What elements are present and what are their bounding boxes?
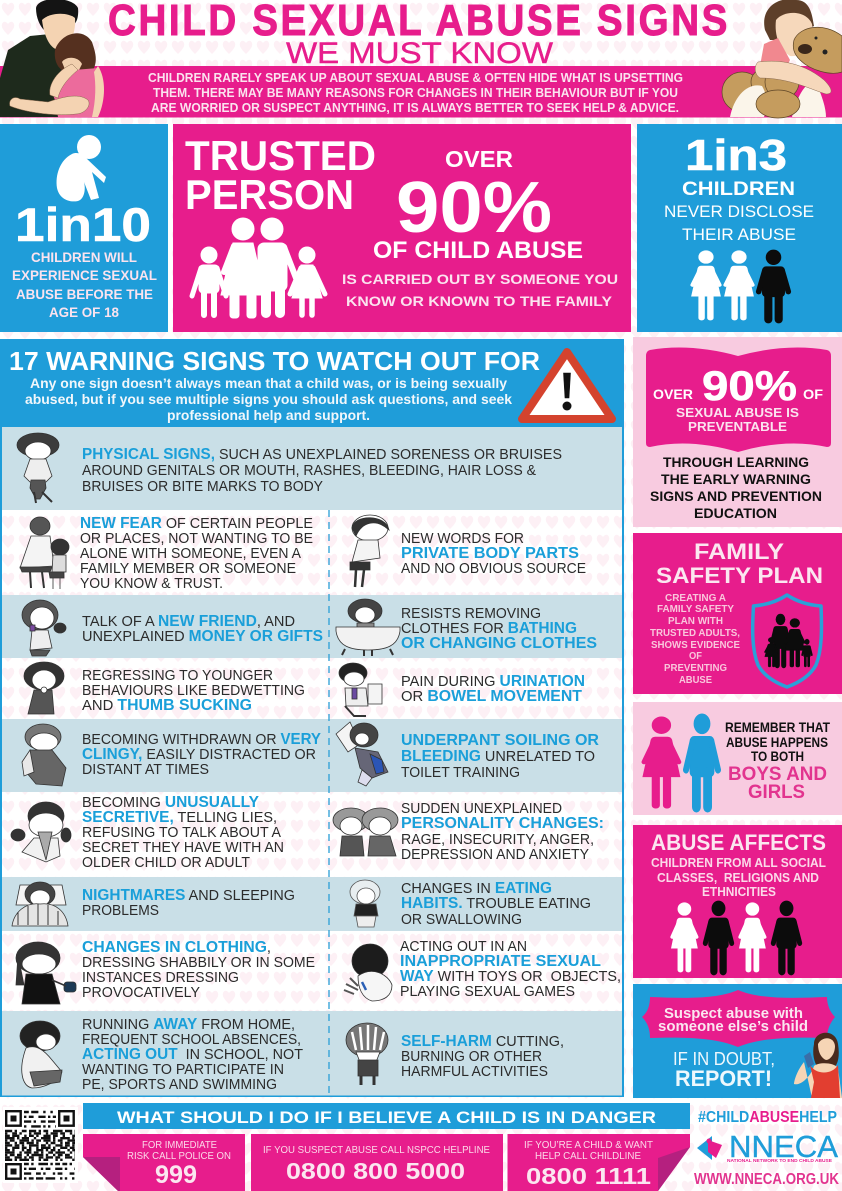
icon: family [192, 218, 325, 318]
icon: child sucking thumb [24, 662, 64, 714]
stat: over 90% [373, 146, 583, 264]
text block: NEW WORDS FOR [401, 531, 524, 547]
subtitle: WE MUST KNOW [286, 37, 554, 70]
tagline: NATIONAL NETWORK TO END CHILD ABUSE [727, 1158, 832, 1163]
text block [25, 376, 513, 423]
icon: girl covering mouth [11, 802, 71, 862]
text block: PROVOCATIVELY [82, 985, 200, 1001]
text block: BECOMING WITHDRAWN OR VERY [82, 731, 322, 748]
text block [82, 613, 323, 645]
text block: SECRETIVE, TELLING LIES, [82, 809, 277, 826]
highlight: boys and girls: GIRLS [748, 782, 805, 803]
text block: BLEEDING UNRELATED TO [401, 748, 595, 765]
heading: trusted person: PERSON [185, 171, 354, 218]
text block: PE, SPORTS AND SWIMMING [82, 1077, 277, 1093]
banner: over 90% [646, 348, 831, 452]
icon: boy [350, 515, 389, 587]
icon: child eating [350, 880, 380, 927]
banner: over 90%: OF [803, 386, 823, 402]
sign: inappropriate sexual way [344, 939, 621, 1001]
text block: PERSONALITY CHANGES: [401, 815, 604, 832]
sign: secretive [11, 794, 284, 871]
callout: report: REPORT! [675, 1066, 772, 1091]
banner: suspect abuse: someone else’s child [658, 1018, 808, 1035]
text block: EDUCATION [694, 506, 777, 521]
text block: ABUSE BEFORE THE [16, 286, 153, 302]
header band [0, 66, 842, 118]
text block [401, 801, 604, 863]
callout: report: IF IN DOUBT, [673, 1049, 775, 1069]
text block: PLAYING SEXUAL GAMES [400, 984, 575, 1000]
text block: ALONE WITH SOMEONE, EVEN A [80, 546, 301, 562]
text block: CHANGES IN CLOTHING, [82, 939, 271, 956]
text block [80, 515, 313, 592]
text block: Any one sign doesn’t always mean that a child was, or is being sexually [30, 376, 508, 391]
text block: OR PLACES, NOT WANTING TO BE [80, 531, 313, 547]
text block: WANTING TO PARTICIPATE IN [82, 1062, 284, 1078]
heading: SAFETY PLAN [656, 563, 823, 588]
text block [651, 855, 826, 899]
wordmark: NNECA [729, 1129, 838, 1164]
icon: curly-haired child [17, 433, 59, 503]
text block: REFUSING TO TALK ABOUT A [82, 825, 281, 841]
text block: DISTANT AT TIMES [82, 762, 209, 778]
text block [82, 939, 315, 1001]
text block [650, 455, 822, 521]
illustration: man comforting girl [0, 0, 104, 117]
intro text: ARE WORRIED OR SUSPECT ANYTHING, IT IS ALWAYS BETTER TO SEEK HELP & ADVICE. [151, 101, 679, 115]
helpline: childline: HELP CALL CHILDLINE [535, 1150, 641, 1162]
text block: REMEMBER THAT [725, 720, 831, 735]
icon: four figures [671, 901, 800, 972]
icon: three figures [692, 250, 788, 320]
text block: TRUSTED ADULTS, [650, 627, 740, 639]
sign: withdrawn [22, 724, 322, 786]
text block: SUDDEN UNEXPLAINED [401, 801, 562, 817]
icon: girl and boy figures [643, 714, 718, 808]
stat: over 90%: OVER [445, 146, 513, 172]
text block [342, 271, 618, 309]
text block: PRIVATE BODY PARTS [401, 545, 579, 562]
panel: family safety plan [633, 533, 842, 694]
sign: personality changes [333, 801, 604, 863]
icon: seated child [57, 135, 106, 201]
text block: KNOW OR KNOWN TO THE FAMILY [346, 293, 613, 309]
sign: running away [20, 1016, 303, 1093]
text block: CHILDREN WILL [31, 249, 137, 265]
text block: RAGE, INSECURITY, ANGER, [401, 832, 594, 848]
helpline: childline [508, 1134, 690, 1191]
text block: BURNING OR OTHER [401, 1049, 542, 1065]
text block [82, 794, 284, 871]
text block: CLASSES, RELIGIONS AND [657, 870, 819, 885]
helpline: NSPCC: IF YOU SUSPECT ABUSE CALL NSPCC HELPLINE [263, 1144, 490, 1156]
banner: suspect abuse: Suspect abuse with [664, 1005, 803, 1022]
text block [401, 1033, 564, 1080]
icon: child sitting [20, 1021, 62, 1088]
text block: BECOMING UNUSUALLY [82, 794, 260, 811]
text block: YOU KNOW & TRUST. [80, 576, 223, 592]
text block: DRESSING SHABBILY OR IN SOME [82, 955, 315, 971]
icon: diamond figure [697, 1136, 722, 1160]
warning header [0, 339, 624, 427]
text block: FAMILY SAFETY [657, 603, 734, 615]
text block [82, 446, 562, 495]
intro text [148, 71, 683, 115]
icon: child on toilet [339, 663, 382, 716]
panel: report [633, 984, 842, 1098]
sign: regressing [24, 662, 305, 714]
text block: UNDERPANT SOILING OR [401, 732, 599, 749]
panel: warning signs [0, 339, 624, 1097]
text block: FREQUENT SCHOOL ABSENCES, [82, 1032, 301, 1048]
sign: new fear [20, 515, 313, 592]
helpline: childline: 0800 1111 [526, 1163, 651, 1189]
text block: CHILDREN [682, 179, 795, 200]
text block [82, 1016, 303, 1093]
sign: nightmares [12, 882, 295, 926]
text block: OR CHANGING CLOTHES [401, 635, 597, 652]
text block: ABUSE HAPPENS [726, 735, 828, 750]
intro text: CHILDREN RARELY SPEAK UP ABOUT SEXUAL ABUSE & OFTEN HIDE WHAT IS UPSETTING [148, 71, 683, 85]
text block: EXPERIENCE SEXUAL [12, 267, 157, 283]
text block: PLAN WITH [668, 615, 723, 627]
text block: ABUSE [679, 674, 712, 686]
text block: INSTANCES DRESSING [82, 970, 239, 986]
text block: CREATING A [665, 592, 726, 604]
stat: over 90%: OF CHILD ABUSE [373, 237, 583, 264]
icon: girl with doll [22, 600, 66, 656]
text block: CHANGES IN EATING [401, 880, 552, 897]
text block: HABITS. TROUBLE EATING [401, 895, 591, 912]
stat: 1in10: 1in10 [15, 198, 151, 251]
intro text: THEM. THERE MAY BE MANY REASONS FOR CHANGES IN THEIR BEHAVIOUR BUT IF YOU [153, 86, 678, 100]
text block [401, 673, 585, 705]
sign: eating habits [350, 880, 591, 928]
text block: REGRESSING TO YOUNGER [82, 668, 273, 684]
icon: child in bath [336, 599, 400, 656]
highlight: boys and girls: BOYS AND [728, 764, 827, 785]
illustration: girl hugging teddy bear [722, 0, 842, 118]
icon: girl in dress [16, 942, 76, 1004]
text block: TOILET TRAINING [401, 765, 520, 781]
helpline: NSPCC [251, 1134, 503, 1191]
helpline: NSPCC: 0800 800 5000 [286, 1158, 465, 1184]
icon: child in bed [12, 882, 68, 926]
text block: PREVENTING [664, 662, 727, 674]
panel: trusted person [173, 124, 631, 332]
text block: RUNNING AWAY FROM HOME, [82, 1016, 295, 1033]
illustration: woman on phone [794, 1033, 842, 1098]
text block [664, 179, 814, 244]
hashtag: #CHILDABUSEHELP [698, 1109, 837, 1126]
icon: adult and child [20, 517, 69, 589]
text block: PAIN DURING URINATION [401, 673, 585, 690]
helpline: police [83, 1134, 245, 1191]
sign: physical [17, 433, 562, 503]
heading: ABUSE AFFECTS [651, 830, 826, 855]
text block: AND THUMB SUCKING [82, 697, 252, 714]
banner: over 90%: PREVENTABLE [688, 419, 787, 434]
text block: IS CARRIED OUT BY SOMEONE YOU [342, 271, 618, 287]
text block [82, 731, 322, 778]
sign: changes in clothing [16, 939, 315, 1004]
icon: child hugging knees [22, 724, 66, 786]
text block: PROBLEMS [82, 903, 159, 919]
panel: 1 in 3 [637, 124, 842, 332]
panel: 1 in 10 [0, 124, 168, 332]
text block: AROUND GENITALS OR MOUTH, RASHES, BLEEDING, HAIR LOSS & [82, 463, 536, 479]
banner: what should I do [83, 1103, 690, 1129]
text block: BRUISES OR BITE MARKS TO BODY [82, 479, 323, 495]
text block: WAY WITH TOYS OR OBJECTS, [400, 968, 621, 985]
banner: what should I do: WHAT SHOULD I DO IF I BELIEVE A CHILD IS IN DANGER [117, 1109, 656, 1127]
text block: THROUGH LEARNING [663, 455, 809, 470]
helpline: police: FOR IMMEDIATE [142, 1139, 217, 1151]
sign: new friend [22, 600, 323, 656]
icon: shield with family [753, 595, 821, 687]
text block: NIGHTMARES AND SLEEPING [82, 887, 295, 904]
text block: SIGNS AND PREVENTION [650, 489, 822, 504]
callout: report [673, 1049, 775, 1091]
text block [401, 880, 591, 928]
QR code [3, 1107, 78, 1183]
heading [656, 539, 823, 588]
text block: TO BOTH [751, 749, 804, 764]
helpline: police: RISK CALL POLICE ON [127, 1150, 231, 1162]
sign: self-harm [346, 1023, 564, 1085]
panel: boys and girls [633, 702, 842, 815]
text block: INAPPROPRIATE SEXUAL [400, 953, 601, 970]
text block [12, 249, 157, 320]
text block: PHYSICAL SIGNS, SUCH AS UNEXPLAINED SORENESS OR BRUISES [82, 446, 562, 463]
sign: bathing [336, 599, 597, 656]
text block [400, 939, 621, 1000]
text block [650, 592, 740, 686]
panel: abuse affects [633, 825, 842, 978]
highlight: boys and girls [728, 764, 827, 803]
text block: CLINGY, EASILY DISTRACTED OR [82, 746, 316, 763]
text block: UNEXPLAINED MONEY OR GIFTS [82, 628, 323, 645]
icon: two children [333, 808, 398, 856]
text block: THE EARLY WARNING [661, 472, 811, 487]
text block: OR BOWEL MOVEMENT [401, 688, 583, 705]
text block [401, 531, 586, 577]
logo: NNECA [694, 1109, 840, 1188]
icon: child with toys [344, 944, 392, 1001]
heading: 17 WARNING SIGNS TO WATCH OUT FOR [9, 346, 540, 376]
sign: urination [339, 663, 585, 716]
banner: over 90%: SEXUAL ABUSE IS [676, 405, 799, 420]
stat: over 90%: 90% [396, 168, 552, 248]
text block: NEVER DISCLOSE [664, 202, 814, 221]
text block: BEHAVIOURS LIKE BEDWETTING [82, 683, 305, 699]
text block: ACTING OUT IN SCHOOL, NOT [82, 1046, 303, 1063]
text block: RESISTS REMOVING [401, 606, 541, 622]
icon: warning triangle [522, 352, 612, 419]
text block: DEPRESSION AND ANXIETY [401, 847, 589, 863]
text block: ETHNICITIES [702, 884, 776, 899]
text block: OLDER CHILD OR ADULT [82, 855, 250, 871]
text block: ACTING OUT IN AN [400, 939, 527, 955]
icon: child in striped hat [346, 1023, 388, 1085]
text block: HARMFUL ACTIVITIES [401, 1064, 548, 1080]
text block [82, 887, 295, 919]
text block: CLOTHES FOR BATHING [401, 620, 577, 637]
text block: SELF-HARM CUTTING, [401, 1033, 564, 1050]
icon: child lying on pillow [336, 722, 388, 786]
text block: TALK OF A NEW FRIEND, AND [82, 613, 295, 630]
text block: abused, but if you see multiple signs you should ask questions, and seek [25, 392, 513, 407]
heading: trusted person [185, 132, 376, 218]
banner: over 90%: 90% [702, 362, 797, 409]
banner: suspect abuse [642, 990, 835, 1047]
text block: FAMILY MEMBER OR SOMEONE [80, 561, 296, 577]
text block: OF [689, 650, 703, 662]
helpline: childline: IF YOU’RE A CHILD & WANT [524, 1139, 654, 1151]
heading: trusted person: TRUSTED [185, 132, 376, 179]
text block [82, 668, 305, 714]
text block: SHOWS EVIDENCE [651, 639, 740, 651]
text block [401, 606, 597, 652]
sign: underpant soiling [336, 722, 599, 786]
text block [401, 732, 599, 781]
stat: 1in3: 1in3 [685, 131, 787, 180]
text block: AND NO OBVIOUS SOURCE [401, 561, 586, 577]
sign: private body parts [350, 515, 586, 587]
text block: CHILDREN FROM ALL SOCIAL [651, 855, 826, 870]
heading: FAMILY [694, 539, 784, 564]
text block [725, 720, 831, 764]
text block: AGE OF 18 [49, 304, 119, 320]
banner: over 90%: OVER [653, 386, 693, 402]
text block: OR SWALLOWING [401, 912, 522, 928]
panel: preventable [633, 337, 842, 527]
text block: SECRET THEY HAVE WITH AN [82, 840, 284, 856]
text block: NEW FEAR OF CERTAIN PEOPLE [80, 515, 313, 532]
helpline: police: 999 [155, 1161, 197, 1189]
text block: THEIR ABUSE [682, 225, 796, 244]
text block: professional help and support. [167, 408, 370, 423]
